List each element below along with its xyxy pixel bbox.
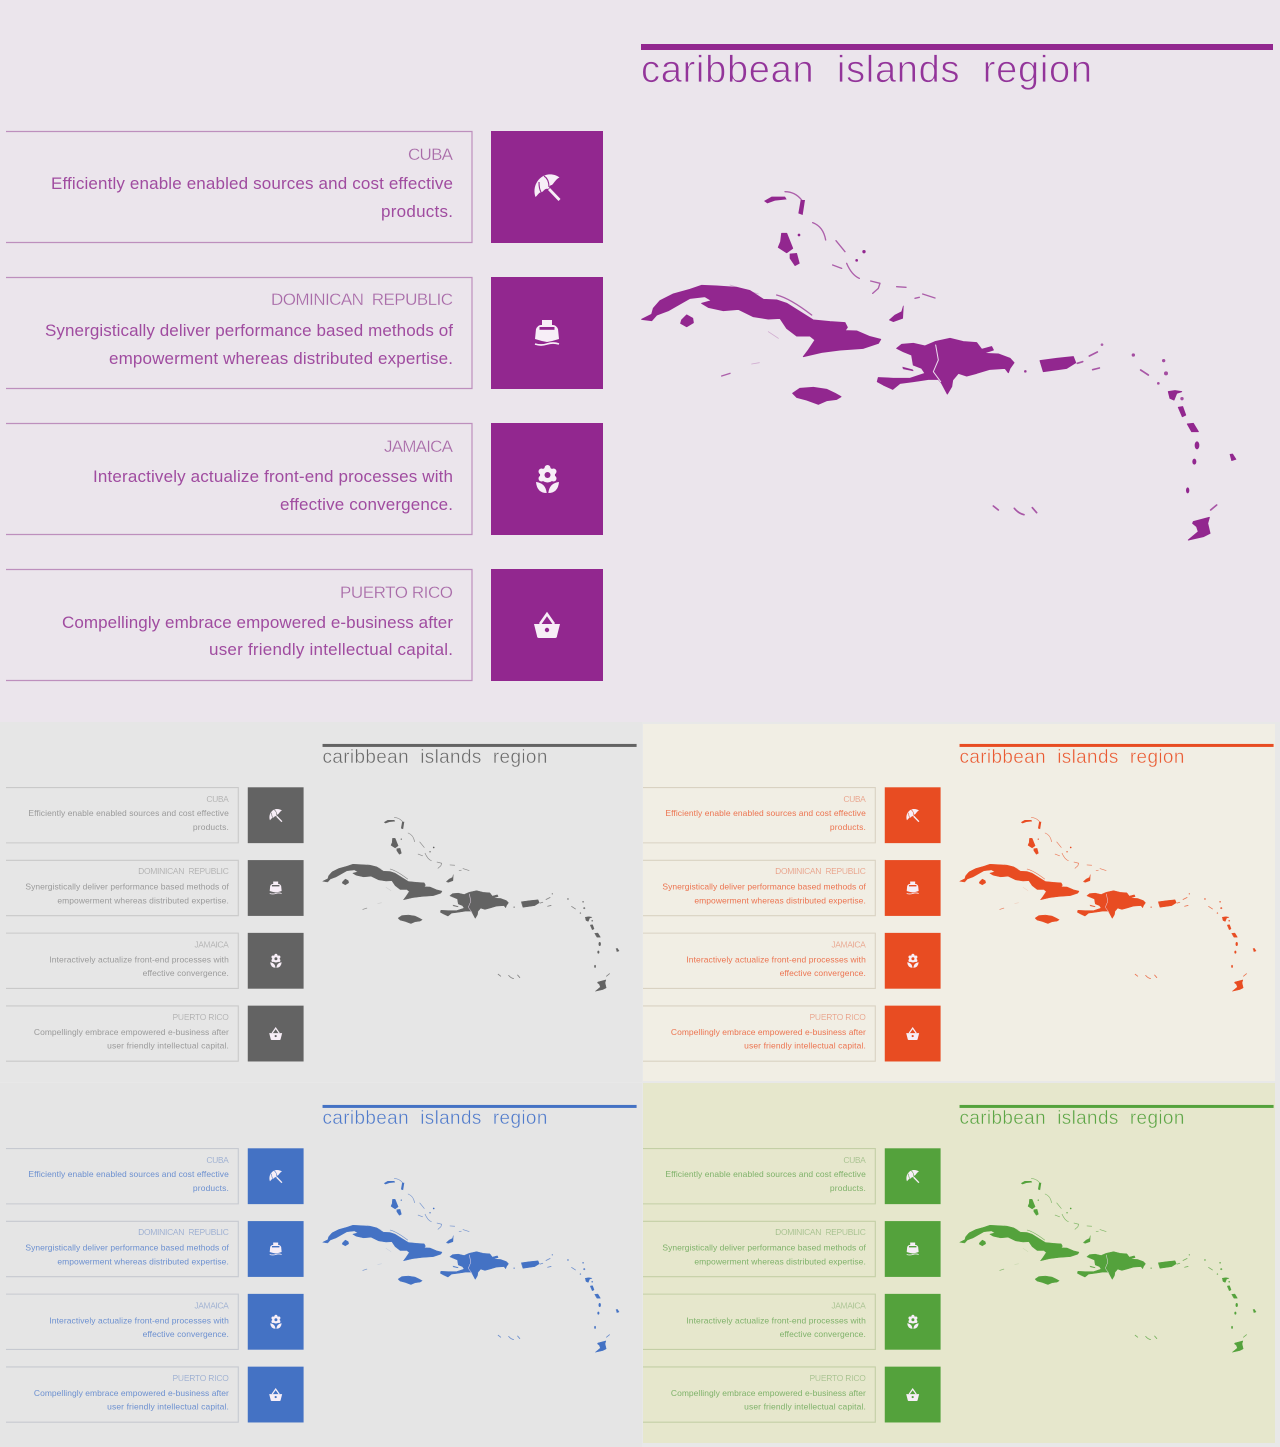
card: Jamaica: Interactively actualize front-end processes with: [93, 467, 453, 486]
icon: flower: [248, 933, 304, 989]
icon: basket: [885, 1367, 941, 1422]
card: Jamaica: [643, 1294, 875, 1349]
card: Dominican Republic: [6, 860, 238, 916]
icon: basket: [885, 1006, 941, 1061]
card: Cuba: products.: [830, 822, 866, 832]
card: Dominican Republic: [6, 1221, 238, 1277]
card: Dominican Republic: DOMINICAN REPUBLIC: [271, 290, 453, 309]
card: Dominican Republic: DOMINICAN REPUBLIC: [138, 866, 229, 876]
card: Puerto Rico: Compellingly embrace empowered e-business after: [34, 1027, 229, 1037]
icon: ship: [491, 277, 603, 389]
card: Cuba: CUBA: [843, 794, 866, 804]
card: Puerto Rico: [643, 1006, 875, 1061]
icon: flower: [248, 1294, 304, 1350]
card: Dominican Republic: empowerment whereas distributed expertise.: [57, 1256, 229, 1266]
icon: beach umbrella: [491, 131, 603, 243]
icon: flower: [491, 423, 603, 535]
title bar and heading: caribbean islands region: [323, 1108, 547, 1129]
card: Puerto Rico: user friendly intellectual capital.: [107, 1041, 229, 1051]
card: Cuba: CUBA: [408, 145, 454, 164]
icon: ship: [885, 860, 941, 916]
card: Puerto Rico: [6, 1006, 238, 1061]
card: Dominican Republic: Synergistically deliver performance based methods of: [25, 881, 229, 891]
card: Dominican Republic: empowerment whereas distributed expertise.: [57, 895, 229, 905]
card: Dominican Republic: DOMINICAN REPUBLIC: [138, 1227, 229, 1237]
card: Puerto Rico: Compellingly embrace empowered e-business after: [671, 1027, 866, 1037]
card: Jamaica: JAMAICA: [194, 939, 229, 949]
card: Cuba: Efficiently enable enabled sources and cost effective: [28, 1169, 229, 1179]
panel: orange variant: [643, 744, 1274, 1061]
icon: beach umbrella: [885, 1148, 941, 1204]
title bar and heading: caribbean islands region: [641, 49, 1092, 91]
panel: purple main: [6, 44, 1273, 681]
card: Cuba: CUBA: [206, 794, 229, 804]
panel background: gray: [0, 722, 642, 1082]
card: Cuba: products.: [193, 822, 229, 832]
card: Jamaica: effective convergence.: [780, 968, 866, 978]
panel background: purple: [0, 0, 1280, 722]
card: Dominican Republic: Synergistically deliver performance based methods of: [662, 1242, 866, 1252]
card: Dominican Republic: DOMINICAN REPUBLIC: [775, 1227, 866, 1237]
card: Dominican Republic: empowerment whereas distributed expertise.: [694, 1256, 866, 1266]
card: Jamaica: effective convergence.: [280, 495, 453, 514]
card: Cuba: Efficiently enable enabled sources and cost effective: [51, 174, 453, 193]
card: Puerto Rico: Compellingly embrace empowered e-business after: [62, 613, 453, 632]
icon: flower: [885, 933, 941, 989]
title bar and heading: caribbean islands region: [960, 747, 1184, 768]
card: Puerto Rico: Compellingly embrace empowered e-business after: [671, 1388, 866, 1398]
card: Dominican Republic: DOMINICAN REPUBLIC: [775, 866, 866, 876]
card: Jamaica: [6, 424, 472, 534]
title bar and heading: caribbean islands region: [323, 747, 547, 768]
card: Jamaica: [6, 933, 238, 988]
card: Dominican Republic: empowerment whereas distributed expertise.: [694, 895, 866, 905]
card: Jamaica: [643, 933, 875, 988]
panel background: green: [643, 1083, 1275, 1443]
panel background: blue: [0, 1083, 642, 1447]
card: Puerto Rico: user friendly intellectual capital.: [744, 1041, 866, 1051]
card: Dominican Republic: Synergistically deliver performance based methods of: [662, 881, 866, 891]
card: Dominican Republic: [643, 1221, 875, 1277]
card: Puerto Rico: [6, 570, 472, 680]
card: Puerto Rico: user friendly intellectual capital.: [744, 1402, 866, 1412]
card: Jamaica: JAMAICA: [831, 1300, 866, 1310]
card: Jamaica: effective convergence.: [780, 1329, 866, 1339]
caribbean map: [323, 1179, 619, 1352]
card: Cuba: CUBA: [843, 1155, 866, 1165]
card: Dominican Republic: [6, 278, 472, 388]
icon: beach umbrella: [248, 1148, 304, 1204]
card: Puerto Rico: Compellingly embrace empowered e-business after: [34, 1388, 229, 1398]
icon: ship: [248, 860, 304, 916]
panel: gray variant: [6, 744, 637, 1061]
icon: beach umbrella: [885, 787, 941, 843]
card: Jamaica: Interactively actualize front-end processes with: [686, 1315, 866, 1325]
card: Jamaica: effective convergence.: [143, 1329, 229, 1339]
panel: green variant: [643, 1105, 1274, 1422]
card: Jamaica: effective convergence.: [143, 968, 229, 978]
card: Cuba: Efficiently enable enabled sources and cost effective: [28, 808, 229, 818]
caribbean map: [642, 192, 1236, 540]
card: Dominican Republic: [643, 860, 875, 916]
card: Jamaica: JAMAICA: [194, 1300, 229, 1310]
icon: basket: [248, 1367, 304, 1422]
card: Puerto Rico: [643, 1367, 875, 1422]
panel background: orange: [643, 724, 1275, 1081]
card: Puerto Rico: PUERTO RICO: [809, 1373, 866, 1383]
card: Cuba: [643, 1149, 875, 1204]
card: Cuba: [6, 788, 238, 843]
icon: ship: [885, 1221, 941, 1277]
card: Cuba: products.: [830, 1183, 866, 1193]
card: Cuba: products.: [381, 202, 453, 221]
caribbean map: [960, 818, 1256, 991]
icon: beach umbrella: [248, 787, 304, 843]
caribbean map: [960, 1179, 1256, 1352]
card: Jamaica: Interactively actualize front-end processes with: [49, 954, 229, 964]
card: Cuba: products.: [193, 1183, 229, 1193]
icon: basket: [491, 569, 603, 681]
icon: basket: [248, 1006, 304, 1061]
icon: ship: [248, 1221, 304, 1277]
card: Cuba: Efficiently enable enabled sources and cost effective: [665, 808, 866, 818]
card: Jamaica: JAMAICA: [831, 939, 866, 949]
card: Cuba: Efficiently enable enabled sources and cost effective: [665, 1169, 866, 1179]
card: Dominican Republic: Synergistically deliver performance based methods of: [45, 321, 453, 340]
card: Jamaica: [6, 1294, 238, 1349]
card: Puerto Rico: PUERTO RICO: [172, 1012, 229, 1022]
card: Puerto Rico: [6, 1367, 238, 1422]
card: Cuba: CUBA: [206, 1155, 229, 1165]
card: Puerto Rico: user friendly intellectual capital.: [107, 1402, 229, 1412]
card: Cuba: [6, 1149, 238, 1204]
card: Dominican Republic: empowerment whereas distributed expertise.: [109, 349, 453, 368]
card: Puerto Rico: PUERTO RICO: [809, 1012, 866, 1022]
panel: blue variant: [6, 1105, 637, 1422]
card: Jamaica: Interactively actualize front-end processes with: [49, 1315, 229, 1325]
card: Jamaica: Interactively actualize front-end processes with: [686, 954, 866, 964]
card: Puerto Rico: user friendly intellectual capital.: [209, 640, 453, 659]
title bar and heading: caribbean islands region: [960, 1108, 1184, 1129]
caribbean map: [323, 818, 619, 991]
card: Puerto Rico: PUERTO RICO: [172, 1373, 229, 1383]
card: Cuba: [643, 788, 875, 843]
card: Cuba: [6, 132, 472, 242]
title bar and heading: [641, 44, 1273, 91]
card: Dominican Republic: Synergistically deliver performance based methods of: [25, 1242, 229, 1252]
icon: flower: [885, 1294, 941, 1350]
card: Jamaica: JAMAICA: [384, 437, 454, 456]
card: Puerto Rico: PUERTO RICO: [340, 583, 453, 602]
